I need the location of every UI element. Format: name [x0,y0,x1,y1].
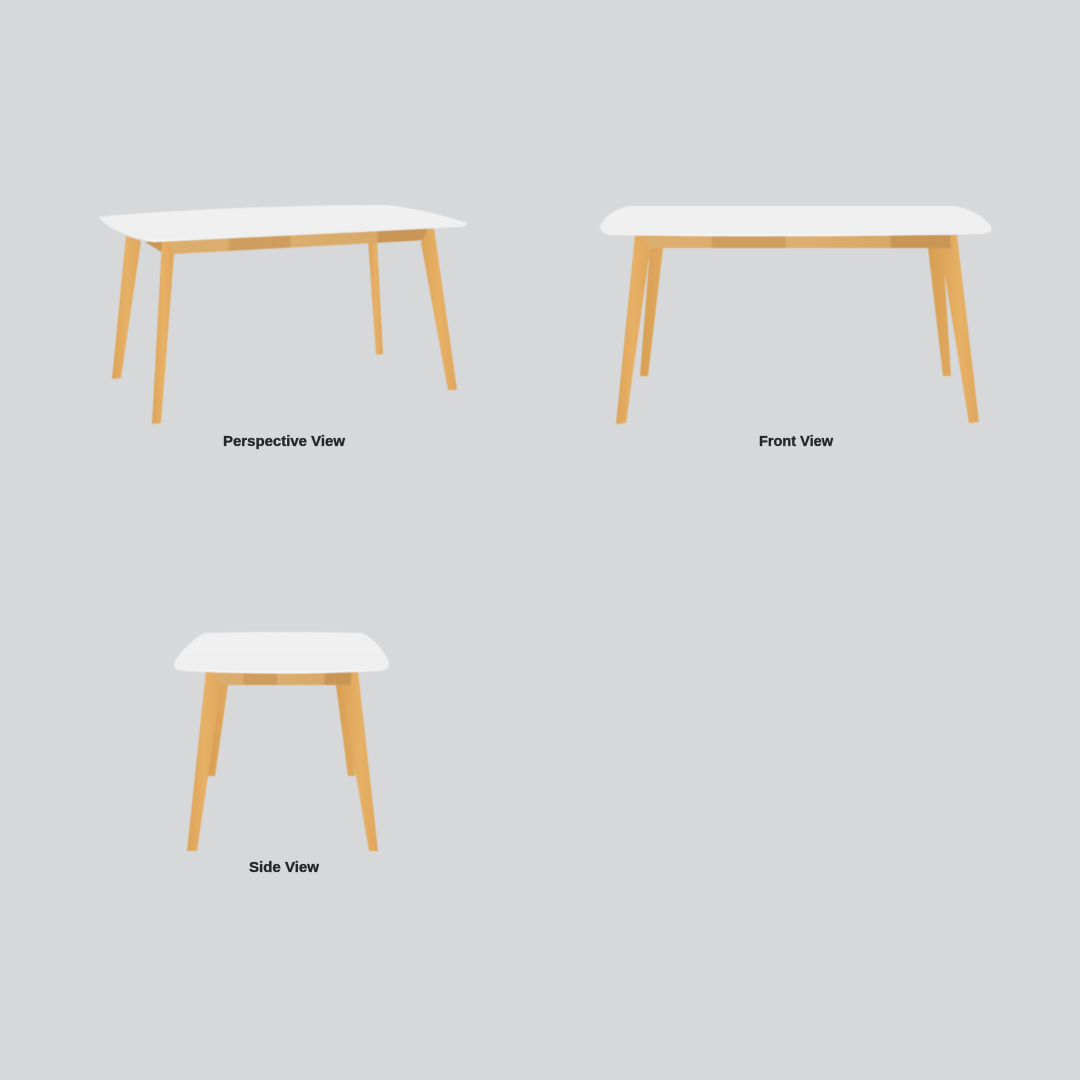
back left leg [208,685,228,776]
front left leg [616,235,650,424]
front left leg [152,241,174,424]
front apron [171,228,428,254]
front right leg [421,228,457,390]
caption: side view: Side View [249,860,320,876]
apron [642,235,951,248]
back left leg [640,248,663,376]
table: front view [600,206,992,424]
front right leg [941,235,979,423]
front left leg [187,671,221,851]
table: perspective view [99,205,467,424]
table: side view [174,632,389,851]
side apron [145,240,163,253]
back right leg [336,685,355,776]
table top [174,632,389,674]
front right leg [342,671,378,851]
back right leg [928,248,951,376]
caption: front view: Front View [759,434,834,450]
table top [600,206,992,236]
caption: perspective view: Perspective View [223,434,346,450]
apron [212,671,352,685]
back left leg [112,236,141,379]
table top [99,205,467,242]
back right leg [368,240,383,355]
